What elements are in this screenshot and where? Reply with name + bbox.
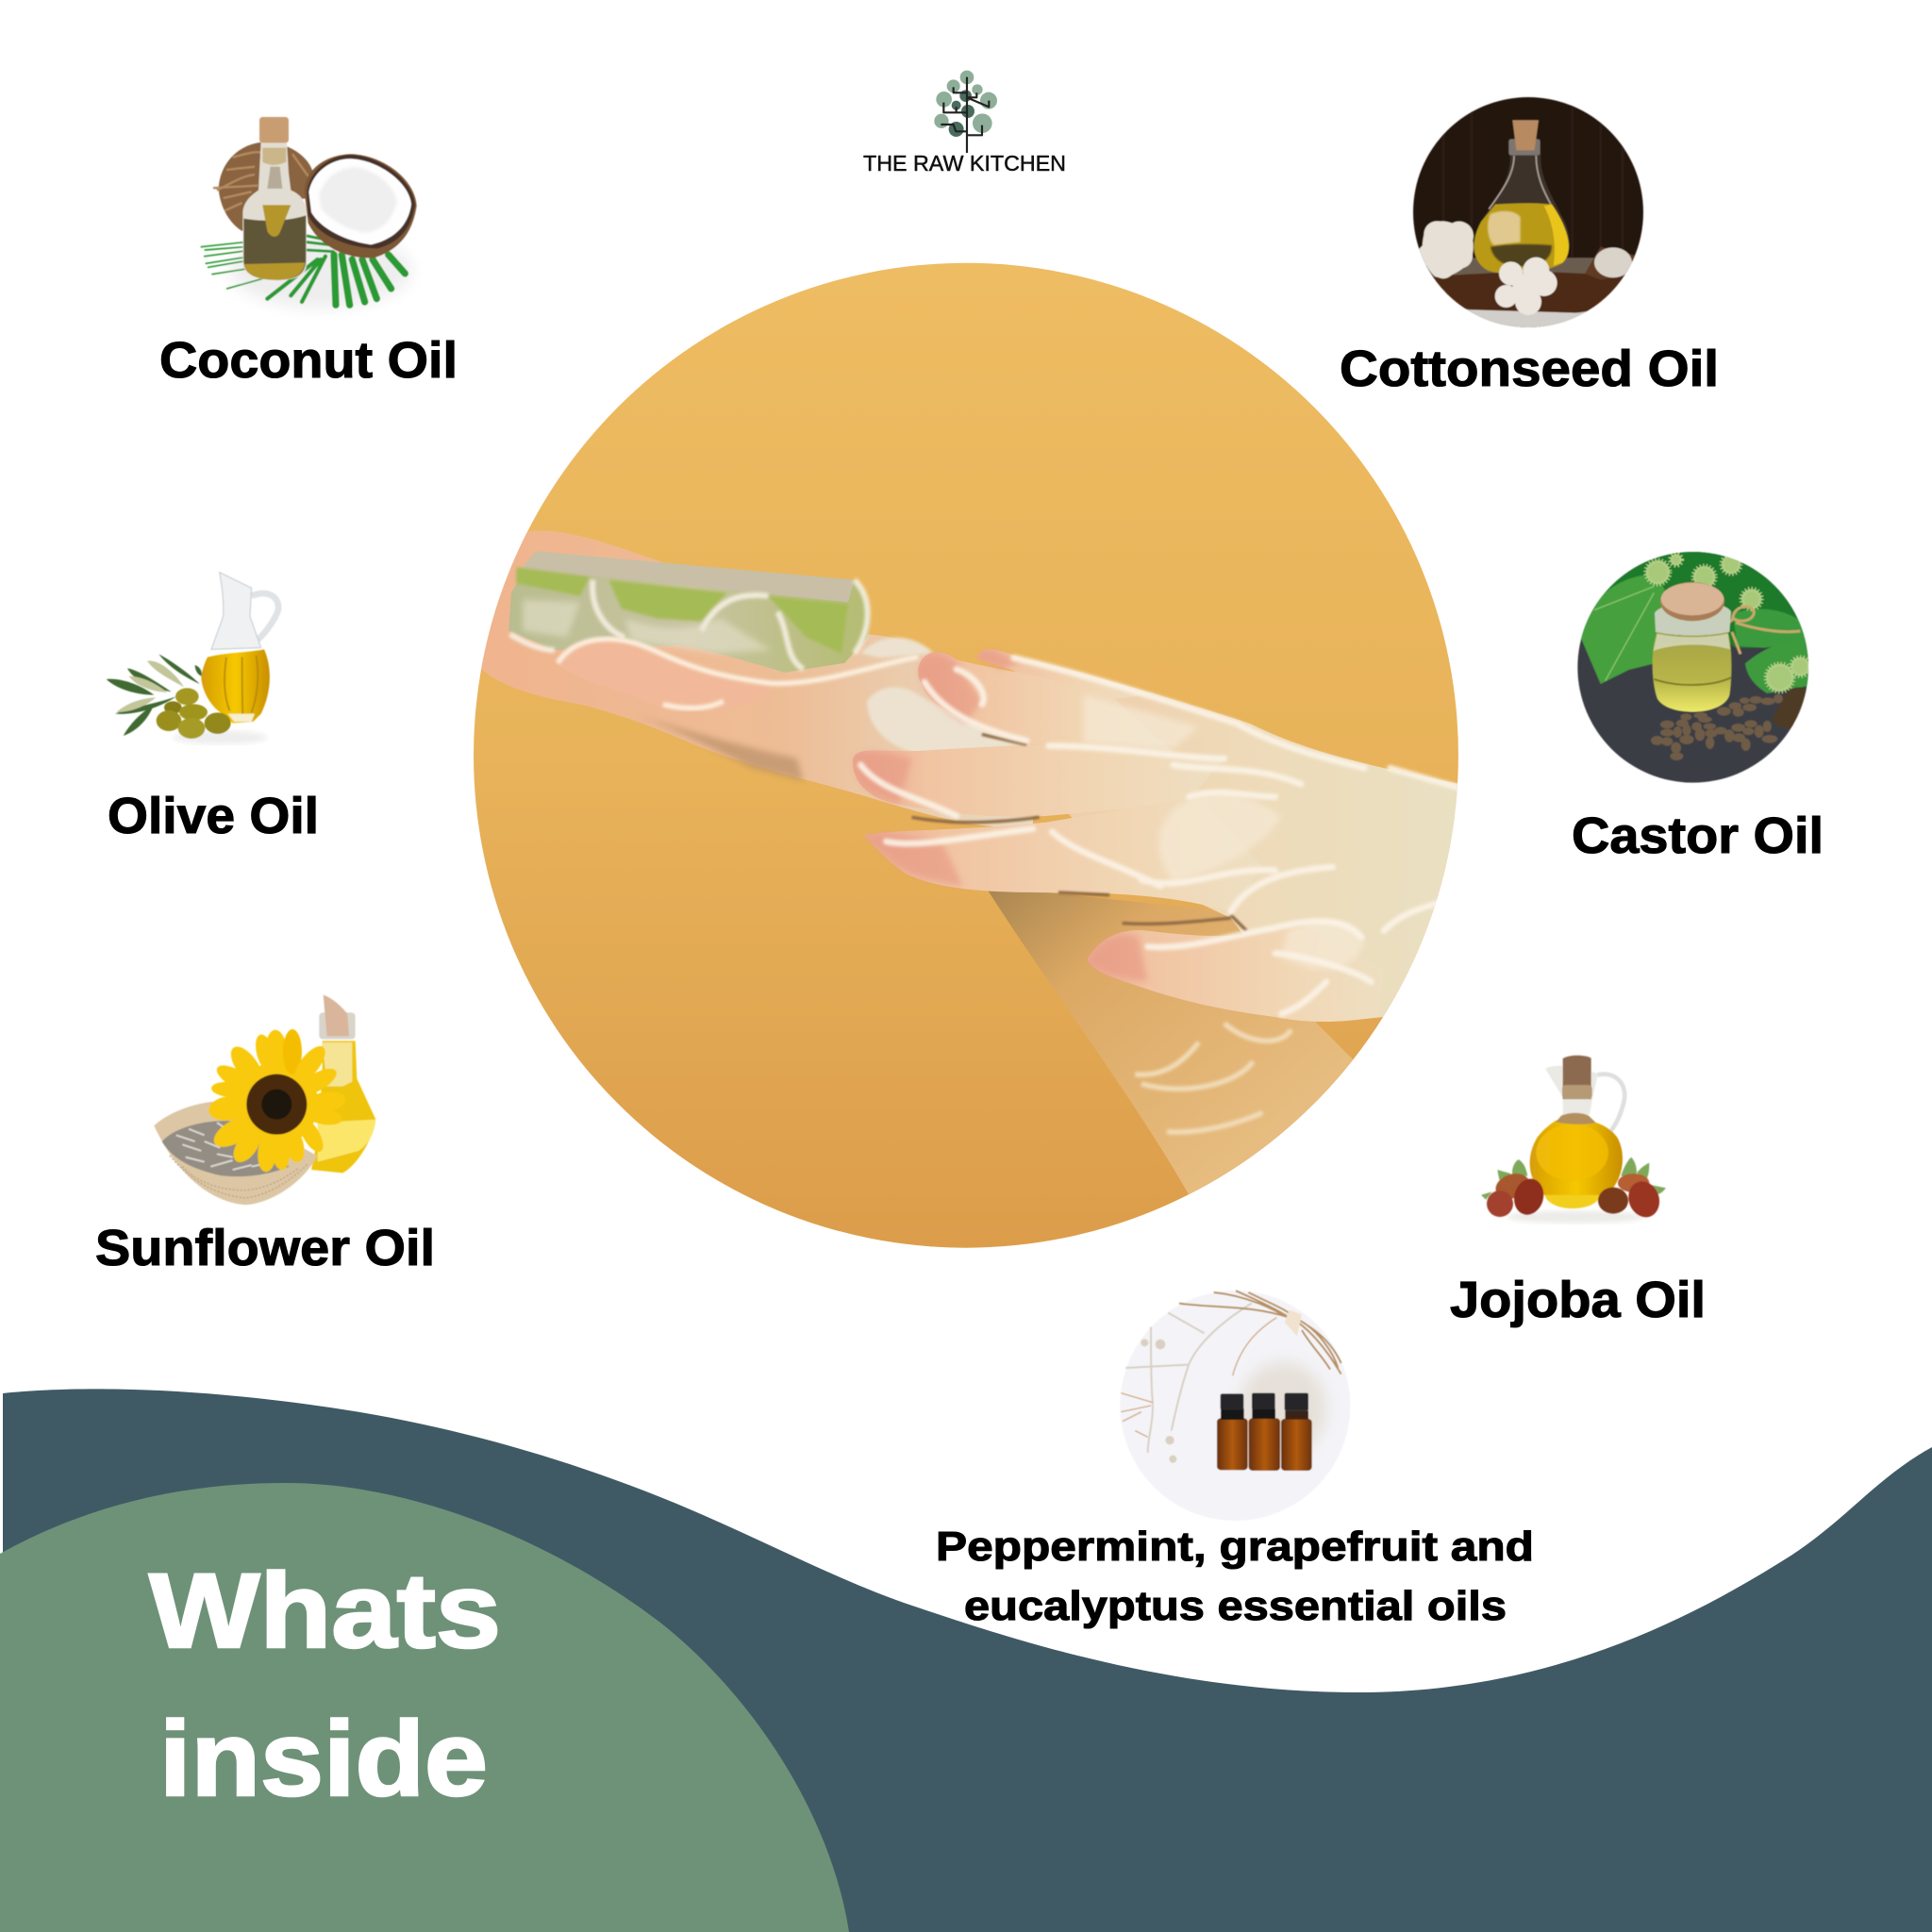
bottle oil: [243, 215, 306, 280]
flask oil: [1474, 203, 1569, 274]
flask base: [1544, 1195, 1601, 1208]
basket: [154, 1101, 317, 1205]
icon: castor oil photo: [1566, 538, 1821, 792]
dark wood backdrop: [1396, 85, 1660, 340]
forearm: [989, 891, 1353, 1194]
coconut white flesh: [308, 158, 411, 244]
label: Castor Oil: Castor Oil: [1572, 808, 1824, 864]
logo wordmark: THE RAW KITCHEN: [863, 151, 1066, 175]
leaf canopy: [1578, 538, 1818, 648]
jar body: [1653, 632, 1731, 712]
foam streaks on hand: [860, 658, 1457, 1014]
seed pile: [162, 1121, 290, 1176]
soap foam: [510, 580, 868, 669]
pink finger tips: [855, 651, 1148, 982]
icon: cottonseed oil photo: [1396, 85, 1660, 340]
bottle neck: [319, 1012, 356, 1040]
bottle left: [1217, 1418, 1248, 1470]
soap lather: [523, 599, 772, 654]
shadows between fingers: [912, 734, 1246, 931]
central soap photo circle: [474, 263, 1460, 1248]
hands holding soap: [481, 531, 1460, 1224]
bundle tie: [1285, 1309, 1302, 1337]
shadow: [1507, 1210, 1644, 1224]
title: Whats inside: Whats: [149, 1552, 501, 1670]
ingredient: jojoba oil: [1450, 1056, 1706, 1328]
sunflower disc: [246, 1074, 307, 1135]
soft shadow: [229, 233, 412, 308]
leaves: [1481, 1158, 1666, 1200]
flask highlights: [1489, 156, 1551, 209]
title: Whats inside: [149, 1552, 501, 1818]
cork: [1563, 1056, 1591, 1099]
bottle right: [1281, 1419, 1312, 1471]
flask neck: [1545, 1066, 1598, 1115]
ingredient: castor oil: [1566, 538, 1824, 864]
finger behind index: [976, 649, 1148, 701]
table surface: [1396, 258, 1660, 276]
flask oil highlight: [1536, 1124, 1608, 1181]
jojoba fruits: [1487, 1170, 1664, 1222]
label: essential oils: Peppermint, grapefruit and: [936, 1524, 1534, 1570]
flask handle: [1597, 1074, 1624, 1132]
soft shadow: [173, 730, 267, 744]
bottle shadow: [1239, 1361, 1327, 1456]
little finger: [1087, 930, 1371, 1022]
olive branch leaves: [107, 654, 202, 736]
ring finger: [864, 818, 1259, 906]
cotton left: [1418, 221, 1474, 278]
blurred twigs: [1125, 1304, 1252, 1453]
index finger: [918, 652, 1174, 752]
spiky pods: [1646, 554, 1809, 691]
lower palm: [481, 531, 1033, 827]
flask neck: [1508, 139, 1541, 156]
sunflower petals: [207, 1029, 347, 1173]
wide foam patches on hand: [1084, 695, 1365, 970]
pale backdrop: [1120, 1291, 1350, 1521]
cork lid: [1660, 582, 1724, 621]
jar glass: [1655, 602, 1731, 636]
castor seeds: [1651, 694, 1783, 760]
seed stripes: [176, 1123, 274, 1170]
title: Whats inside: inside: [159, 1700, 488, 1818]
basket weave: [170, 1156, 308, 1198]
icon: tree: [934, 71, 997, 153]
cork: [1512, 120, 1539, 150]
dried twig bundle: [1179, 1291, 1341, 1374]
sunflower petal base: [235, 1062, 318, 1145]
soap bar: [508, 551, 870, 673]
coconut hollow: [319, 167, 397, 233]
oil highlights: [244, 205, 305, 280]
foam on wrist and palm: [860, 638, 1014, 754]
palm fronds: [201, 236, 405, 305]
ingredient: cottonseed oil: [1340, 85, 1719, 397]
ingredient: essential oils: [936, 1291, 1534, 1629]
cotton right: [1585, 247, 1639, 280]
label: Olive Oil: Olive Oil: [108, 788, 319, 844]
thumb over soap: [560, 640, 641, 681]
icon: sunflower, seeds and bottle: [154, 995, 375, 1205]
label: Coconut Oil: Coconut Oil: [159, 332, 458, 389]
label: essential oils: [936, 1524, 1534, 1629]
label: Cottonseed Oil: Cottonseed Oil: [1340, 341, 1719, 397]
soap top face: [518, 551, 855, 602]
foam on forearm: [1135, 1024, 1291, 1132]
label: essential oils: eucalyptus essential oils: [964, 1583, 1507, 1629]
icon: olive oil jug: [107, 573, 278, 744]
jug glass: [211, 573, 261, 649]
green hill background: [0, 1483, 849, 1932]
bottle body: [311, 1041, 375, 1173]
soap green patches: [516, 567, 848, 654]
thumb foam: [558, 639, 918, 708]
dark teal wave background: [3, 1389, 1932, 1932]
jug oil: [201, 649, 270, 724]
shaded wrist underside: [658, 722, 804, 781]
coconut fibres: [213, 152, 308, 210]
main leaf: [1581, 574, 1670, 684]
olives: [157, 688, 231, 739]
ingredient: sunflower oil: [95, 995, 435, 1276]
bottle pale oil: [323, 1042, 352, 1087]
middle finger: [853, 744, 1224, 817]
back of right hand: [1014, 659, 1460, 1022]
bottle glass: [242, 142, 307, 280]
flask shoulder: [1556, 1113, 1596, 1124]
jug handle: [252, 593, 278, 640]
photo backdrop: [474, 263, 1458, 1248]
jar upper glass: [1654, 634, 1730, 651]
ingredient: olive oil: [107, 573, 319, 844]
wooden board: [1434, 273, 1625, 313]
bottle cork: [324, 995, 349, 1036]
bottle highlights: [318, 1120, 375, 1162]
right leaves: [1733, 609, 1808, 648]
label: Sunflower Oil: Sunflower Oil: [95, 1220, 435, 1276]
jar oil line: [1654, 677, 1731, 685]
coconut half shell: [305, 154, 417, 258]
flask glass: [1474, 153, 1570, 274]
oil stripes: [225, 656, 258, 714]
blurred buds: [1141, 1339, 1176, 1463]
dried flower tips: [1121, 1318, 1276, 1437]
icon: jojoba fruit and flask: [1481, 1056, 1666, 1224]
flask body: [1530, 1119, 1623, 1204]
ingredient: coconut oil: [159, 117, 458, 389]
coconut dark rim: [307, 155, 415, 248]
icon: coconut and oil bottle: [201, 117, 417, 308]
bottle cork: [259, 117, 289, 142]
bottle neck highlight: [262, 148, 286, 165]
logo: The Raw Kitchen: [863, 71, 1066, 175]
string loop: [1660, 607, 1800, 654]
cotton centre: [1495, 258, 1557, 315]
icon: essential oil bottles photo: [1120, 1291, 1350, 1521]
brown husks: [1772, 688, 1811, 729]
whole coconut: [219, 142, 314, 231]
pale leaves: [116, 660, 184, 712]
jug base: [228, 714, 255, 722]
label: Jojoba Oil: Jojoba Oil: [1450, 1272, 1706, 1328]
bottle centre: [1249, 1418, 1280, 1471]
grey ground: [1396, 308, 1660, 340]
oil highlight: [1488, 211, 1521, 245]
slate backdrop: [1566, 538, 1821, 792]
